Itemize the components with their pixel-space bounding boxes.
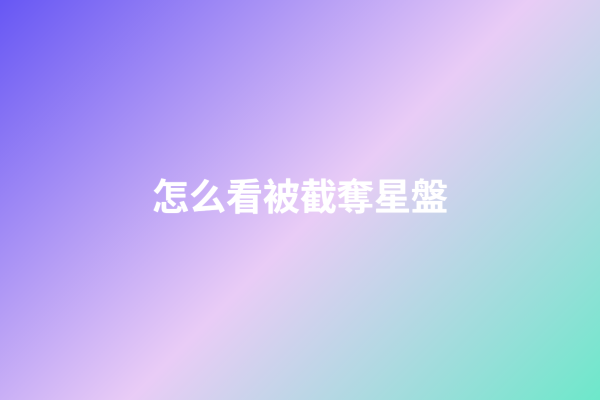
title: 怎么看被截奪星盤 — [152, 177, 448, 218]
